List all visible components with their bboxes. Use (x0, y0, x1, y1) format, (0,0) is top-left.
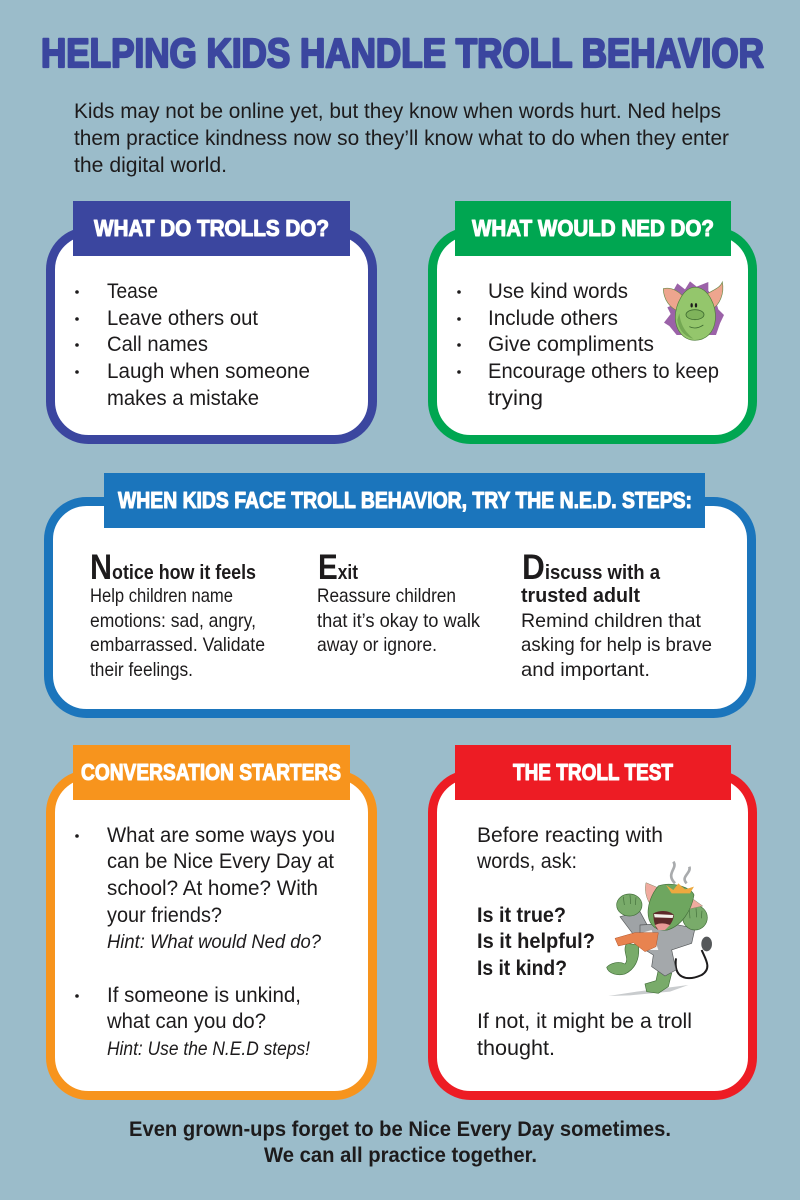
list: ned behaviors (457, 280, 719, 410)
list: ned behaviors: trying (488, 387, 543, 410)
question: unkindness: what can you do? (106, 1010, 266, 1033)
footer message: We can all practice together. (264, 1144, 537, 1167)
list: troll behaviors: Tease (107, 280, 158, 303)
icon: angry troll (607, 862, 712, 996)
text: troll thought (477, 1010, 692, 1060)
step: discuss (521, 548, 712, 681)
text: three questions: Is it helpful? (477, 930, 595, 953)
question: being nice: What are some ways you (107, 824, 335, 847)
panel: what do trolls do (50, 201, 372, 440)
question: being nice (75, 824, 335, 953)
list: ned behaviors: Encourage others to keep (488, 360, 719, 383)
step: notice: Notice how it feels (90, 548, 256, 587)
list: troll behaviors: Laugh when someone (107, 360, 310, 383)
heading: the troll test: THE TROLL TEST (513, 759, 673, 785)
question: unkindness: Hint: Use the N.E.D steps! (107, 1038, 311, 1060)
step: notice: emotions: sad, angry, (90, 610, 256, 632)
list: troll behaviors (75, 280, 310, 410)
step: notice: Help children name (90, 585, 233, 607)
heading: N.E.D. steps (104, 473, 705, 528)
question: unkindness: If someone is unkind, (107, 984, 301, 1007)
panel: N.E.D. steps (48, 473, 752, 714)
list: ned behaviors: Include others (488, 307, 618, 330)
list: troll behaviors: Leave others out (107, 307, 258, 330)
list: ned behaviors: Give compliments (488, 333, 654, 356)
footer message (129, 1118, 671, 1167)
heading: conversation starters (73, 745, 350, 800)
list: troll behaviors: makes a mistake (107, 387, 259, 410)
heading: what do trolls do: WHAT DO TROLLS DO? (94, 215, 329, 241)
step: exit: Exit (318, 548, 358, 587)
text: three questions (477, 904, 595, 980)
heading: what do trolls do (73, 201, 350, 256)
step: exit: away or ignore. (317, 634, 437, 656)
heading: N.E.D. steps: WHEN KIDS FACE TROLL BEHAVIOR, TRY THE N.E.D. STEPS: (118, 487, 692, 513)
step: notice (90, 548, 265, 681)
question: unkindness (75, 984, 311, 1060)
step: discuss: and important. (521, 659, 650, 681)
heading: conversation starters: CONVERSATION STARTERS (81, 759, 341, 785)
heading: the troll test (455, 745, 731, 800)
text: before reacting: words, ask: (476, 850, 577, 873)
heading: what would ned do (455, 201, 731, 256)
step: discuss: Discuss with a (522, 548, 661, 587)
step: discuss: trusted adult (521, 584, 640, 607)
step: notice: their feelings. (90, 659, 193, 681)
intro text: Kids may not be online yet, but they know when words hurt. Ned helps (74, 100, 721, 123)
panel: conversation starters (50, 745, 372, 1096)
step: discuss: asking for help is brave (521, 634, 712, 656)
heading: what would ned do: WHAT WOULD NED DO? (472, 215, 714, 241)
text: before reacting: Before reacting with (477, 824, 663, 847)
intro text: them practice kindness now so they’ll know what to do when they enter (74, 127, 729, 150)
list: ned behaviors: Use kind words (488, 280, 628, 303)
step: exit (317, 548, 480, 656)
panel: what would ned do (432, 201, 752, 440)
panel: the troll test (432, 745, 752, 1096)
icon: ned the green creature (663, 281, 724, 340)
step: discuss: Remind children that (521, 610, 702, 632)
question: being nice: can be Nice Every Day at (107, 850, 334, 873)
text: before reacting (476, 824, 663, 873)
text: troll thought: If not, it might be a troll (477, 1010, 692, 1033)
footer message: Even grown-ups forget to be Nice Every Day sometimes. (129, 1118, 671, 1141)
list: troll behaviors: Call names (107, 333, 208, 356)
question: being nice: Hint: What would Ned do? (107, 931, 321, 953)
intro text (74, 100, 729, 177)
intro text: the digital world. (74, 154, 227, 177)
step: exit: that it’s okay to walk (317, 610, 480, 632)
step: notice: embarrassed. Validate (90, 634, 265, 656)
text: three questions: Is it kind? (477, 957, 567, 980)
text: three questions: Is it true? (477, 904, 566, 927)
text: troll thought: thought. (477, 1037, 555, 1060)
step: exit: Reassure children (317, 585, 456, 607)
question: being nice: your friends? (107, 904, 222, 927)
question: being nice: school? At home? With (107, 877, 318, 900)
